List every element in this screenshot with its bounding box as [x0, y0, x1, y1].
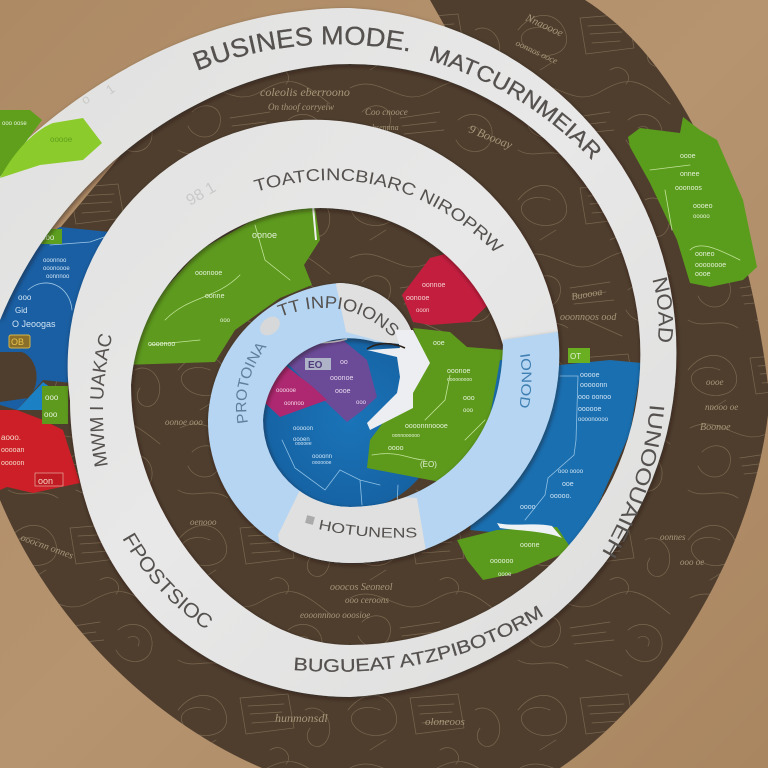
panel: centre blue disc with purple and magenta: oooen — [293, 437, 310, 443]
bottom band label: BUGUEAT ATZPIBOTORM — [294, 606, 543, 672]
panel: large green inner left: ooo — [220, 318, 231, 324]
icon: grey smudge on inner ring — [256, 313, 284, 339]
panel: centre blue disc with purple and magenta: ooooon — [293, 426, 313, 432]
panel: left red: oon — [38, 476, 53, 486]
panel: green centre right: ooonoe — [447, 368, 470, 375]
panel: right blue: ooo oonoo — [578, 394, 611, 401]
panel: centre blue disc with purple and magenta: ooooee — [295, 441, 312, 447]
panel: right green tag — [568, 348, 590, 363]
grey top segment — [336, 283, 411, 344]
panel: right blue: oooonoooo — [578, 417, 609, 423]
panel: left blue: O Jeoogas — [12, 319, 56, 329]
panel: right blue: oooooe — [578, 406, 601, 413]
icon: white question-mark hook — [367, 330, 430, 430]
doodle notes in brown band: Boonoe — [700, 422, 731, 433]
panel: green centre right: (EO) — [420, 460, 437, 469]
panel: left blue: ooonoooe — [43, 266, 70, 272]
doodle notes in brown band: ooonnoos ood — [560, 312, 617, 323]
panel: centre blue disc with purple and magenta: oooooe — [276, 388, 297, 394]
doodle notes in brown band: oooe — [706, 377, 724, 387]
panel: right green tag: OT — [570, 352, 581, 361]
icon: small yellow tag: OB — [11, 337, 24, 347]
panel: left red: ooo — [44, 410, 58, 419]
panel: top-left green flags: ooooe — [50, 135, 73, 144]
panel: left red: ooooon — [1, 460, 24, 467]
panel: red centre right: oonnoe — [422, 282, 445, 289]
spiral white band — [0, 8, 676, 697]
panel: top-right green: ooooo — [693, 214, 710, 220]
panel: large green inner left: ooonooe — [195, 270, 222, 277]
outer ring title: MATCURNMEIAR — [430, 46, 600, 160]
panel: green centre right: ooe — [433, 340, 445, 347]
light-blue band label: IONOD — [520, 354, 532, 408]
doodle notes in brown band: ooo ceroons — [345, 595, 389, 605]
outer ring title: BUSINES MODE. — [192, 26, 408, 70]
panel: centre blue disc with purple and magenta: oooonn — [312, 454, 332, 460]
doodle notes in brown band: oloneoos — [425, 716, 465, 728]
panel: centre blue disc with purple and magenta: ooooooe — [312, 460, 332, 466]
icon: small grey square — [305, 515, 315, 525]
doodle notes in brown band: ooo oe — [680, 557, 704, 567]
panel: top-right green: oooooooe — [695, 262, 726, 269]
panel: green centre right: oooonnnoooe — [405, 423, 448, 430]
panel: right blue: ooooonn — [580, 382, 607, 389]
doodle notes in brown band: Nnaoooe — [523, 11, 565, 40]
panel: right blue: oooo — [520, 504, 536, 511]
panel: top-right green: ooneo — [695, 251, 715, 258]
panel: right blue: ooooo. — [550, 493, 571, 500]
panel: right blue: ooooe — [580, 372, 600, 379]
panel: left green tag: ooo — [41, 233, 55, 242]
panel: top-right green — [628, 117, 757, 287]
panel: top-left green flags: ooo oose — [2, 121, 27, 127]
panel: left green tag — [36, 229, 62, 244]
doodle notes in brown band: Buoooa — [571, 287, 603, 303]
panel: centre blue disc with purple and magenta: ooonoe — [330, 375, 353, 382]
doodle notes in brown band: coleolis eberroono — [260, 85, 350, 99]
doodle notes in brown band: nnooo oe — [705, 402, 738, 412]
inner ring label: bottom: HOTUNENS — [320, 520, 416, 538]
faint ring marks: o — [78, 91, 93, 107]
panel: centre blue disc with purple and magenta — [263, 338, 419, 507]
doodle notes in brown band: ooocos Seoneol — [330, 582, 393, 593]
panel: left red: aooo. — [1, 433, 21, 442]
panel: right blue: ooe — [562, 481, 574, 488]
doodle notes in brown band: oonnes — [660, 532, 686, 542]
middle ring title: TOATCINCBIARC NIROPRW — [253, 168, 504, 251]
panel: large green inner left: oooonoo — [148, 341, 175, 348]
grey bottom segment — [278, 490, 428, 565]
panel: left blue: ooonnoo — [43, 258, 67, 264]
panel: top-right green: oooe — [695, 271, 711, 278]
panel: right blue — [470, 360, 642, 547]
panel: large green inner left — [125, 195, 320, 365]
faint ring marks: 98 1 — [184, 179, 219, 209]
outer ring title — [192, 26, 600, 160]
panel: left blue — [0, 227, 127, 410]
panel: top-right green: oooe — [680, 153, 696, 160]
doodle notes in brown band: ooocnn onnes — [19, 532, 75, 562]
doodle notes in brown band: oonnos ooce — [514, 38, 559, 66]
panel: centre blue disc with purple and magenta: EO — [308, 360, 323, 371]
doodle notes in brown band: Coo cnooce — [365, 107, 408, 117]
left brown blob — [0, 352, 37, 402]
panel: lower green: ooone — [520, 542, 540, 549]
doodle notes in brown band: hunmonsdl — [275, 711, 328, 725]
doodle notes in brown band: oonoe ooo — [165, 417, 203, 427]
panel: green centre right: ooo — [463, 395, 475, 402]
doodle notes in brown band: eooonnnoo ooosioe — [300, 610, 370, 620]
panel: centre blue disc with purple and magenta: oo — [340, 359, 348, 366]
panel: large green inner left: oonoe — [252, 230, 277, 240]
icon: small yellow tag — [9, 335, 30, 348]
panel: centre blue disc with purple and magenta: oooe — [335, 388, 351, 395]
panel: left red: ooo — [45, 393, 59, 402]
panel: green centre right: oooo — [388, 445, 404, 452]
panel: lower green: oooooo — [490, 558, 513, 565]
panel: green centre right: oonnoooooo — [392, 433, 420, 439]
magenta section — [262, 365, 327, 417]
panel: left blue: oonnnoo — [46, 274, 70, 280]
right band label: upper: NOAD — [652, 277, 674, 342]
faint ring marks — [78, 81, 219, 209]
panel: right blue: ooo oooo — [558, 469, 584, 475]
inner ring label: top: TT INPIOIONS — [276, 296, 398, 336]
panel: top-right green: onnee — [680, 171, 700, 178]
panel: lower green: oooe — [498, 572, 512, 578]
panel: large green inner left: oonne — [205, 293, 225, 300]
panel: red centre right: oonooe — [406, 295, 429, 302]
panel: green centre right — [367, 328, 505, 482]
panel: top-right green: ooonoos — [675, 185, 702, 192]
spiral light-blue band — [208, 270, 559, 575]
panel: lower green — [457, 523, 572, 580]
doodle notes in brown band: oenooo — [190, 517, 217, 527]
panel: left blue: Gid — [15, 306, 27, 315]
panel: green centre right: ooooooooo — [447, 377, 472, 383]
faint ring marks: 1 — [103, 81, 118, 97]
panel: top-left green flags — [0, 110, 102, 178]
panel: green centre right: ooo — [463, 408, 474, 414]
lower-left band label: FPOSTSIOC — [123, 532, 212, 628]
panel: top-right green: oooeo — [693, 203, 713, 210]
panel: left blue: ooo — [18, 293, 32, 302]
doodle notes in brown band: 9 Boooay — [467, 122, 515, 152]
panel: centre blue disc with purple and magenta: ooo — [356, 400, 367, 406]
panel: red centre right — [402, 250, 488, 325]
left band label: MWM I UAKAC — [90, 334, 112, 466]
panel: left red: ooooan — [1, 447, 24, 454]
purple section — [287, 336, 377, 422]
panel: left red — [0, 382, 80, 493]
right band label: lower: IUNOOUAIEH — [602, 406, 664, 558]
panel: red centre right: ooon — [416, 308, 429, 314]
doodle notes in brown band: bsennna — [372, 123, 399, 132]
doodle notes in brown band: On thoof corryeiw — [268, 102, 334, 112]
panel: centre blue disc with purple and magenta: oonnoo — [284, 401, 305, 407]
